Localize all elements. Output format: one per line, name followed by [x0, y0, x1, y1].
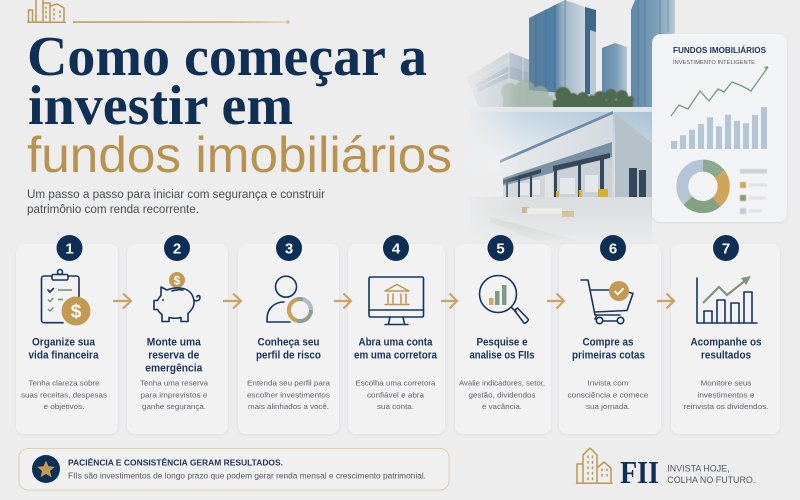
icon: star badge [32, 455, 60, 483]
step 7 description: investimentos e [698, 390, 754, 400]
donut chart [682, 166, 724, 207]
arrow 5 to 6 [547, 294, 564, 308]
step 7 heading: Acompanhe os [690, 337, 762, 349]
step 2 heading: Monte uma [147, 337, 201, 349]
step 2 description: para imprevistos e [140, 390, 208, 400]
step 1 description: Tenha clareza sobre [28, 379, 100, 388]
icon: monitor with bank [369, 277, 424, 324]
step 5 description [459, 379, 545, 411]
step 4 description: confiável e abra [367, 390, 425, 400]
panel: step 4 [348, 235, 445, 434]
header rule [73, 20, 290, 24]
panel: dashboard card [652, 34, 787, 222]
step 7 description: Monitore seus [700, 379, 752, 388]
step 1 heading: Organize sua [32, 337, 95, 349]
step number 4 [383, 235, 409, 261]
title: fundos imobiliários [27, 127, 452, 183]
dashboard heading: INVESTIMENTO INTELIGENTE [673, 60, 755, 66]
step 7 description [684, 379, 768, 411]
step 7 heading: resultados [701, 350, 751, 362]
step 2 description: ganhe segurança. [142, 402, 206, 411]
step 3 description: Entenda seu perfil para [247, 379, 331, 388]
hero image: buildings and warehouse [467, 0, 675, 245]
ground [488, 197, 652, 238]
step 6 description: Invista com [588, 379, 628, 388]
panel: step 6 [559, 235, 661, 434]
step 6 description: consciência e comece [568, 390, 648, 400]
step 3 heading: Conheça seu [258, 337, 320, 349]
step number 3: 3 [285, 240, 293, 258]
step number 1: 1 [65, 240, 74, 258]
dashboard heading [673, 46, 767, 66]
brand tagline: COLHA NO FUTURO. [667, 475, 755, 486]
brand wordmark: FII [620, 454, 659, 490]
step number 6 [600, 235, 626, 261]
subtitle: Um passo a passo para iniciar com segurança e construir [27, 187, 325, 201]
step 6 heading [572, 337, 645, 362]
step 2 heading: reserva de [148, 350, 199, 362]
step number 7 [713, 235, 739, 261]
icon: magnifier with bars [480, 276, 528, 323]
step number 5: 5 [496, 240, 505, 258]
step 6 description [568, 379, 648, 411]
panel: step 2 [127, 235, 228, 434]
warehouse [470, 111, 652, 197]
step 2 description: Tenha uma reserva [140, 379, 209, 388]
bar chart [671, 107, 767, 149]
title [27, 26, 452, 183]
arrow 4 to 5 [441, 294, 457, 308]
step 1 heading [28, 337, 99, 362]
callout text: PACIÊNCIA E CONSISTÊNCIA GERAM RESULTADOS. [68, 457, 283, 468]
step 6 heading: Compre as [582, 337, 634, 349]
step 5 heading: Pesquise e [476, 337, 528, 349]
step 2 heading [145, 337, 202, 375]
step 1 heading: vida financeira [28, 350, 99, 362]
road strip between images [480, 107, 652, 112]
icon: shopping cart with check [581, 280, 633, 324]
subtitle: patrimônio com renda recorrente. [27, 202, 199, 216]
arrow 2 to 3 [223, 294, 241, 308]
towers [529, 0, 675, 108]
step 4 heading: em uma corretora [354, 350, 437, 362]
step 5 description: Avalie indicadores, setor, [459, 379, 545, 388]
icon: clipboard with coin: $ [71, 302, 82, 322]
step 7 heading [690, 337, 762, 362]
brand tagline: INVISTA HOJE, [667, 464, 730, 475]
step 4 description: sua conta. [377, 402, 414, 411]
step 3 description: escolher investimentos [247, 390, 330, 400]
step number 6: 6 [609, 240, 617, 258]
step 1 description: e objetivos. [44, 402, 84, 411]
greenery and trees [501, 80, 634, 109]
callout text [68, 457, 426, 481]
step 4 heading [354, 337, 437, 362]
panel: step 1 [16, 235, 118, 434]
step 5 description: gestão, dividendos [468, 390, 536, 400]
step number 2: 2 [173, 240, 181, 258]
step 5 heading: analise os FIIs [470, 350, 535, 362]
step number 3 [276, 235, 302, 261]
panel: step 7 [671, 235, 780, 434]
callout text: FIIs são investimentos de longo prazo que podem gerar renda mensal e crescimento patrimonial. [68, 472, 426, 481]
step 3 description [247, 379, 331, 411]
step 4 description [356, 379, 437, 411]
dashboard heading: FUNDOS IMOBILIÁRIOS [673, 46, 767, 55]
brand tagline [667, 464, 755, 486]
step number 7: 7 [722, 240, 730, 258]
title: Como começar a [27, 26, 427, 88]
upper building left [470, 52, 555, 107]
step 6 description: sua jornada. [586, 402, 630, 411]
step 1 description [21, 379, 107, 411]
step number 2 [164, 235, 190, 261]
icon: piggy bank [154, 272, 200, 322]
line chart [671, 66, 768, 116]
subtitle [27, 187, 325, 216]
title: investir em [28, 75, 293, 137]
panel: step 5 [455, 235, 551, 434]
step 5 heading [470, 337, 535, 362]
donut legend [740, 169, 767, 214]
icon: top building logo [28, 0, 65, 22]
step 5 description: e vacância. [482, 402, 522, 411]
step 4 heading: Abra uma conta [358, 337, 433, 349]
step 3 heading [256, 337, 321, 362]
arrow 6 to 7 [657, 294, 674, 308]
step 2 description [140, 379, 209, 411]
icon: clipboard with coin [42, 270, 90, 326]
icon: piggy bank: $ [174, 274, 181, 288]
step 4 description: Escolha uma corretora [356, 379, 437, 388]
arrow 3 to 4 [334, 294, 351, 308]
callout: patience and consistency [19, 448, 449, 490]
step 2 heading: emergência [145, 363, 202, 375]
icon: person with risk ring [267, 276, 311, 322]
step 1 description: suas receitas, despesas [21, 390, 107, 400]
step 7 description: reinvista os dividendos. [684, 402, 768, 411]
step 3 heading: perfil de risco [256, 350, 321, 362]
step number 1 [56, 235, 82, 261]
panel: step 3 [238, 235, 339, 434]
step 3 description: mais alinhados a você. [248, 402, 329, 411]
step number 5 [488, 235, 514, 261]
logo: FII brand [576, 448, 755, 490]
icon: growth chart [697, 276, 757, 323]
icon: brand building [576, 448, 612, 483]
arrow 1 to 2 [113, 294, 131, 308]
step 6 heading: primeiras cotas [572, 350, 645, 362]
step number 4: 4 [392, 240, 401, 258]
